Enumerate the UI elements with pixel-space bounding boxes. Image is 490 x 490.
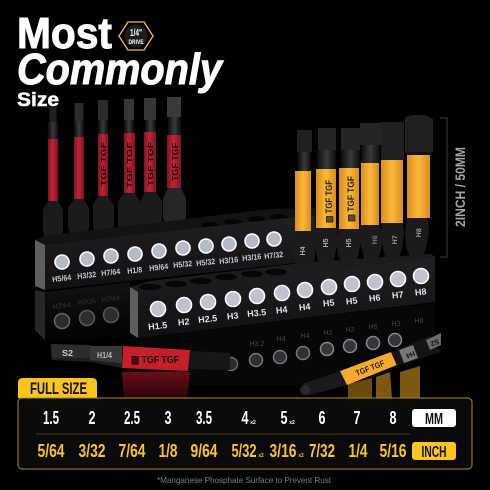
row: millimetres: 3 xyxy=(164,408,172,428)
socket H3: H3 xyxy=(226,310,239,322)
yellow bit H4: H4 xyxy=(300,246,307,255)
row: inches: 5/16 xyxy=(380,441,406,461)
yellow bit H5: ▧ TGF TGF xyxy=(324,180,334,223)
yellow bit H5: H5 xyxy=(323,238,330,247)
socket H3.5: H3.5 xyxy=(247,307,267,319)
red bit H1/8 xyxy=(118,99,140,236)
block top face xyxy=(35,208,315,245)
yellow bit H5 second: H5 xyxy=(346,238,353,247)
lying red bit: ▧ TGF TGF xyxy=(131,354,179,366)
socket H6: H6 xyxy=(368,292,381,304)
socket H8: H8 xyxy=(414,286,427,298)
socket H2.5 xyxy=(198,294,218,325)
tab: full size xyxy=(18,378,97,398)
socket H7 xyxy=(390,272,406,301)
yellow bit H5 second: ▧ TGF TGF xyxy=(346,176,356,222)
row: millimetres: 7 xyxy=(354,408,360,428)
row: millimetres: 6 xyxy=(318,408,326,428)
row: millimetres: 4 xyxy=(242,408,248,428)
row: millimetres: x2 xyxy=(289,420,295,426)
lying yellow bit: H4 xyxy=(405,349,416,359)
red bit H3/32 xyxy=(68,103,89,241)
reflection: upper block: H2\64 xyxy=(52,302,72,311)
yellow bit H5 second xyxy=(336,128,361,266)
socket H1/8 xyxy=(127,247,143,276)
socket H1.5: H1.5 xyxy=(148,320,168,332)
yellow bit H7 xyxy=(381,122,404,261)
socket H4 second: H4 xyxy=(298,301,311,313)
socket H1.5 xyxy=(148,302,168,332)
socket H3/32 xyxy=(77,252,97,281)
yellow bit H7: H7 xyxy=(392,235,399,245)
socket H5/32 xyxy=(173,241,193,270)
socket H5/32 second: H5/32 xyxy=(196,257,216,268)
label: INCH xyxy=(412,442,456,461)
reflection: lower block: H8 xyxy=(415,318,424,325)
socket H5/64 xyxy=(52,255,72,284)
row: millimetres: 2.5 xyxy=(124,408,140,428)
reflection: lower block: H3 xyxy=(392,321,401,328)
red bit H5/64 xyxy=(43,107,63,245)
title: Most xyxy=(17,9,112,58)
title: Commonly xyxy=(17,45,224,94)
socket H3.5 xyxy=(247,288,267,319)
row: inches: 1/4 xyxy=(348,441,368,461)
socket H5/32: H5/32 xyxy=(173,259,193,270)
reflection: lower block: H3.2 xyxy=(250,341,264,348)
panel: full size chart xyxy=(18,378,472,469)
socket H8 xyxy=(414,268,428,298)
title xyxy=(17,9,224,111)
red bit H9/64: TGF TGF xyxy=(146,141,155,186)
dimension: 2 inch / 50 mm: 2INCH / 50MM xyxy=(452,147,468,227)
red bits row xyxy=(43,97,186,245)
row: millimetres: x2 xyxy=(250,420,256,426)
row: millimetres: 3.5 xyxy=(196,408,212,428)
upper socket block xyxy=(35,208,315,290)
size table xyxy=(18,398,472,469)
socket H5/64: H5/64 xyxy=(52,273,72,284)
lying red bit: S2 xyxy=(62,348,73,358)
label: MM xyxy=(412,409,456,428)
reflection: lower block: H2 xyxy=(324,330,333,337)
row: millimetres: 2 xyxy=(88,408,96,428)
footnote: *Manganese Phosphate Surface to Prevent Rust xyxy=(157,476,332,485)
socket H4 xyxy=(274,286,290,316)
red bit H7/64: TGF TGF xyxy=(101,141,108,186)
row: inches: 3/32 xyxy=(78,441,106,461)
socket H3/32: H3/32 xyxy=(77,270,97,281)
row: inches: 7/64 xyxy=(118,441,146,461)
red bit H7/64 xyxy=(93,100,114,238)
socket H3 xyxy=(226,292,240,322)
row: inches: 9/64 xyxy=(190,441,218,461)
title: Size xyxy=(17,90,59,111)
socket H4 second xyxy=(298,282,312,313)
label: MM: MM xyxy=(425,411,443,428)
socket H5 second: H5 xyxy=(345,295,358,307)
socket H6 xyxy=(368,274,382,304)
block side face xyxy=(35,240,45,290)
label: INCH: INCH xyxy=(422,444,446,461)
socket H7/32: H7/32 xyxy=(264,250,284,261)
socket H7/64 xyxy=(101,249,121,278)
lying yellow bit: TGF TGF xyxy=(354,359,386,378)
red bit H5/32: TGF TGF xyxy=(171,143,180,181)
socket H5 second xyxy=(344,276,360,307)
yellow bit H8 xyxy=(405,115,433,256)
row: inches: 5/32 xyxy=(232,441,256,461)
block front face xyxy=(45,215,315,290)
upper block socket markers xyxy=(52,232,284,284)
icon: 1/4 drive hex badge: DRIVE xyxy=(128,40,144,46)
socket H3/16 second: H3/16 xyxy=(242,252,262,263)
reflection: lower block: H6 xyxy=(369,324,378,331)
lying red bit xyxy=(50,344,230,371)
socket H5/32 second xyxy=(196,239,216,268)
lower socket block xyxy=(130,254,435,338)
socket H3/16 xyxy=(219,237,239,266)
block front face xyxy=(138,257,435,338)
lying yellow bit xyxy=(300,333,441,396)
icon: 1/4 drive hex badge xyxy=(119,22,153,50)
row: millimetres: 8 xyxy=(390,408,396,428)
reflections under lying bits xyxy=(122,366,420,398)
socket H7/32 xyxy=(264,232,284,261)
reflection: lower block: H4 xyxy=(277,336,286,343)
lower block socket markers xyxy=(148,268,428,332)
row: inches: 3/16 xyxy=(270,441,296,461)
red bit H9/64 xyxy=(140,98,162,234)
socket H2 xyxy=(176,298,192,328)
block side face xyxy=(130,287,138,338)
row: inches: x2 xyxy=(298,453,304,459)
dimension: 2 inch / 50 mm xyxy=(440,118,468,257)
socket H2.5: H2.5 xyxy=(198,313,218,325)
icon: 1/4 drive hex badge: 1/4" xyxy=(130,28,142,39)
yellow bits row xyxy=(289,115,433,272)
yellow bit H8: H8 xyxy=(416,228,423,238)
reflection: upper block: H3\35 xyxy=(77,298,97,307)
socket H3/16 second xyxy=(242,234,262,263)
red bit H5/32 xyxy=(163,97,186,231)
lying yellow bit: S2 xyxy=(429,337,440,347)
socket H5 xyxy=(322,280,336,309)
socket H5: H5 xyxy=(322,297,335,309)
row: millimetres: 1.5 xyxy=(43,408,59,428)
socket H4: H4 xyxy=(275,304,288,316)
row: millimetres xyxy=(43,408,396,428)
socket H2: H2 xyxy=(177,316,190,328)
yellow bit H5 xyxy=(312,128,338,268)
yellow bit H6 xyxy=(358,123,383,263)
red bit H1/8: TGF TGF xyxy=(125,141,134,188)
tab: full size: FULL SIZE xyxy=(30,379,87,398)
row: inches xyxy=(38,441,406,461)
block top face xyxy=(130,254,435,292)
row: millimetres: 5 xyxy=(280,408,288,428)
socket H3/16: H3/16 xyxy=(219,255,239,266)
socket H7: H7 xyxy=(391,289,404,301)
yellow bit H4 xyxy=(289,130,316,272)
row: inches: 5/64 xyxy=(38,441,64,461)
row: inches: 1/8 xyxy=(158,441,178,461)
reflection: upper block xyxy=(35,282,130,340)
reflection: lower block: H2 xyxy=(346,327,355,334)
reflection: upper block: H3\64 xyxy=(101,295,121,304)
socket H1/8: H1/8 xyxy=(127,265,143,276)
socket H9/64: H9/64 xyxy=(149,262,169,273)
reflection: lower block xyxy=(140,303,435,385)
row: inches: x2 xyxy=(258,453,264,459)
reflection: lower block: H4 xyxy=(301,333,310,340)
socket H9/64 xyxy=(149,244,169,273)
lying red bit: H1/4 xyxy=(97,351,112,360)
yellow bit H6: H6 xyxy=(372,235,379,245)
row: inches: 7/32 xyxy=(309,441,335,461)
socket H7/64: H7/64 xyxy=(101,267,121,278)
